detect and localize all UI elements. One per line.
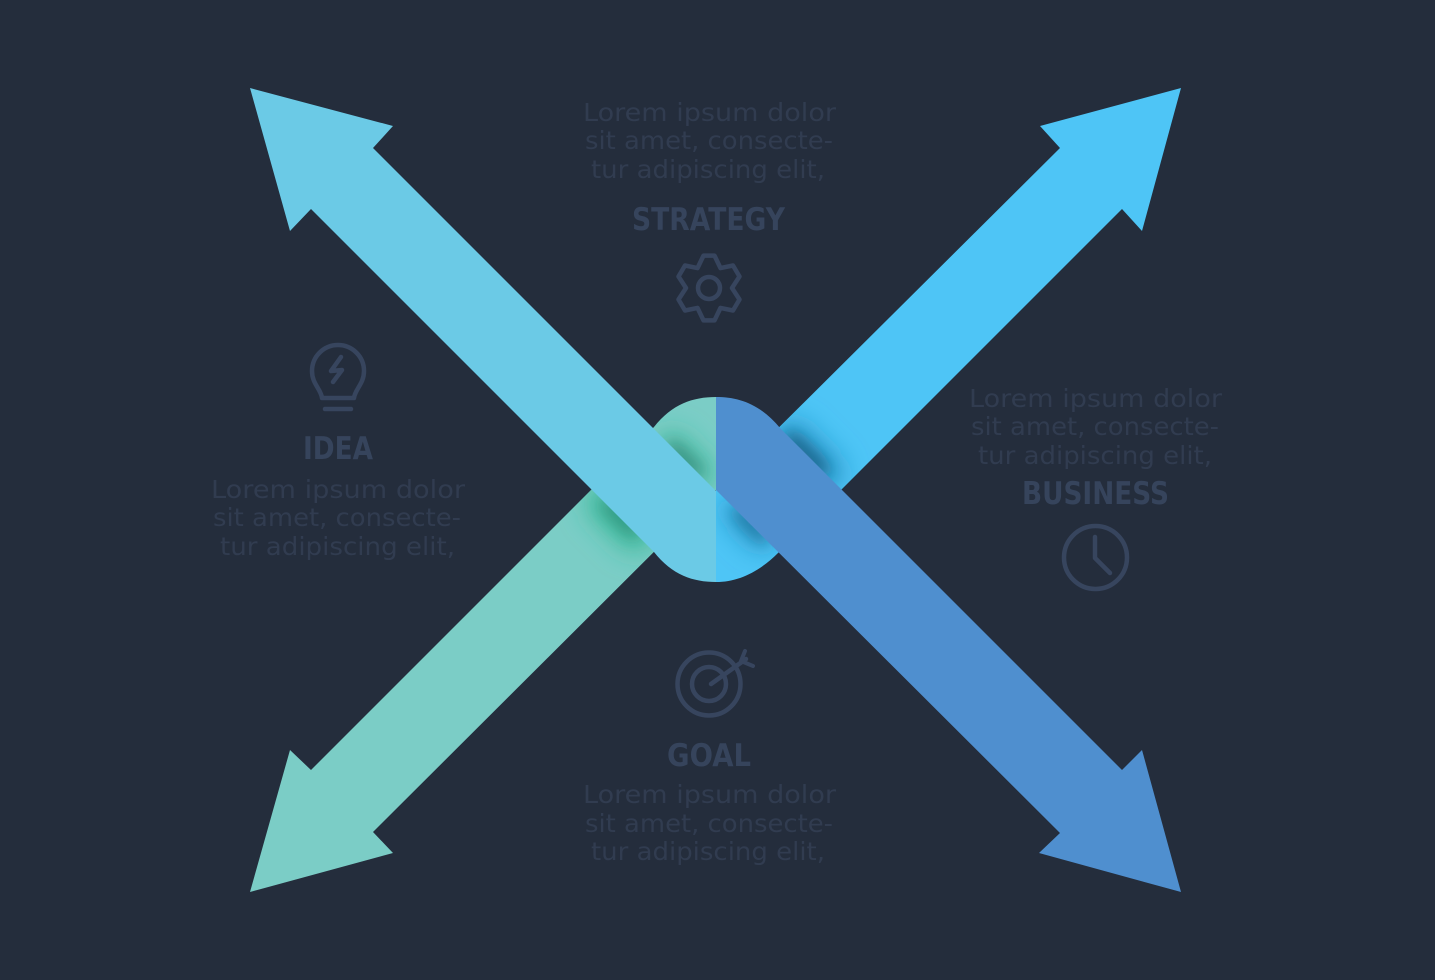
icon: target with dart [678, 651, 753, 716]
text block: business description: Lorem ipsum dolor [969, 384, 1223, 413]
arrow: top right, sky blue [716, 88, 1181, 582]
text block: goal description [583, 780, 837, 866]
text block: business description [969, 384, 1223, 470]
text block: goal description: sit amet, consecte- [585, 809, 833, 838]
text block: business description: tur adipiscing elit, [978, 441, 1212, 470]
text block: strategy description: Lorem ipsum dolor [583, 98, 837, 127]
text block: idea description: Lorem ipsum dolor [211, 475, 466, 504]
text block: idea description [211, 475, 466, 561]
text block: strategy description: sit amet, consecte- [585, 126, 833, 155]
icon: light bulb [312, 345, 364, 409]
text block: strategy description [583, 98, 837, 184]
heading: strategy: STRATEGY [632, 202, 785, 238]
heading: business: BUSINESS [1022, 476, 1169, 512]
text block: idea description: sit amet, consecte- [213, 503, 461, 532]
heading: goal: GOAL [667, 738, 751, 774]
text block: idea description: tur adipiscing elit, [220, 532, 455, 561]
heading: idea: IDEA [303, 431, 373, 467]
icon: clock [1064, 526, 1127, 589]
infographic: four crossing arrows [214, 88, 1222, 892]
arrow: bottom right, dark blue [716, 397, 1181, 892]
text block: goal description: tur adipiscing elit, [591, 837, 825, 866]
icon: gear [678, 256, 740, 320]
arrow: bottom left, green [250, 397, 716, 892]
text block: goal description: Lorem ipsum dolor [583, 780, 837, 809]
arrow: top left, pale blue [250, 88, 716, 582]
text block: business description: sit amet, consecte- [971, 412, 1219, 441]
text block: strategy description: tur adipiscing elit, [591, 155, 825, 184]
